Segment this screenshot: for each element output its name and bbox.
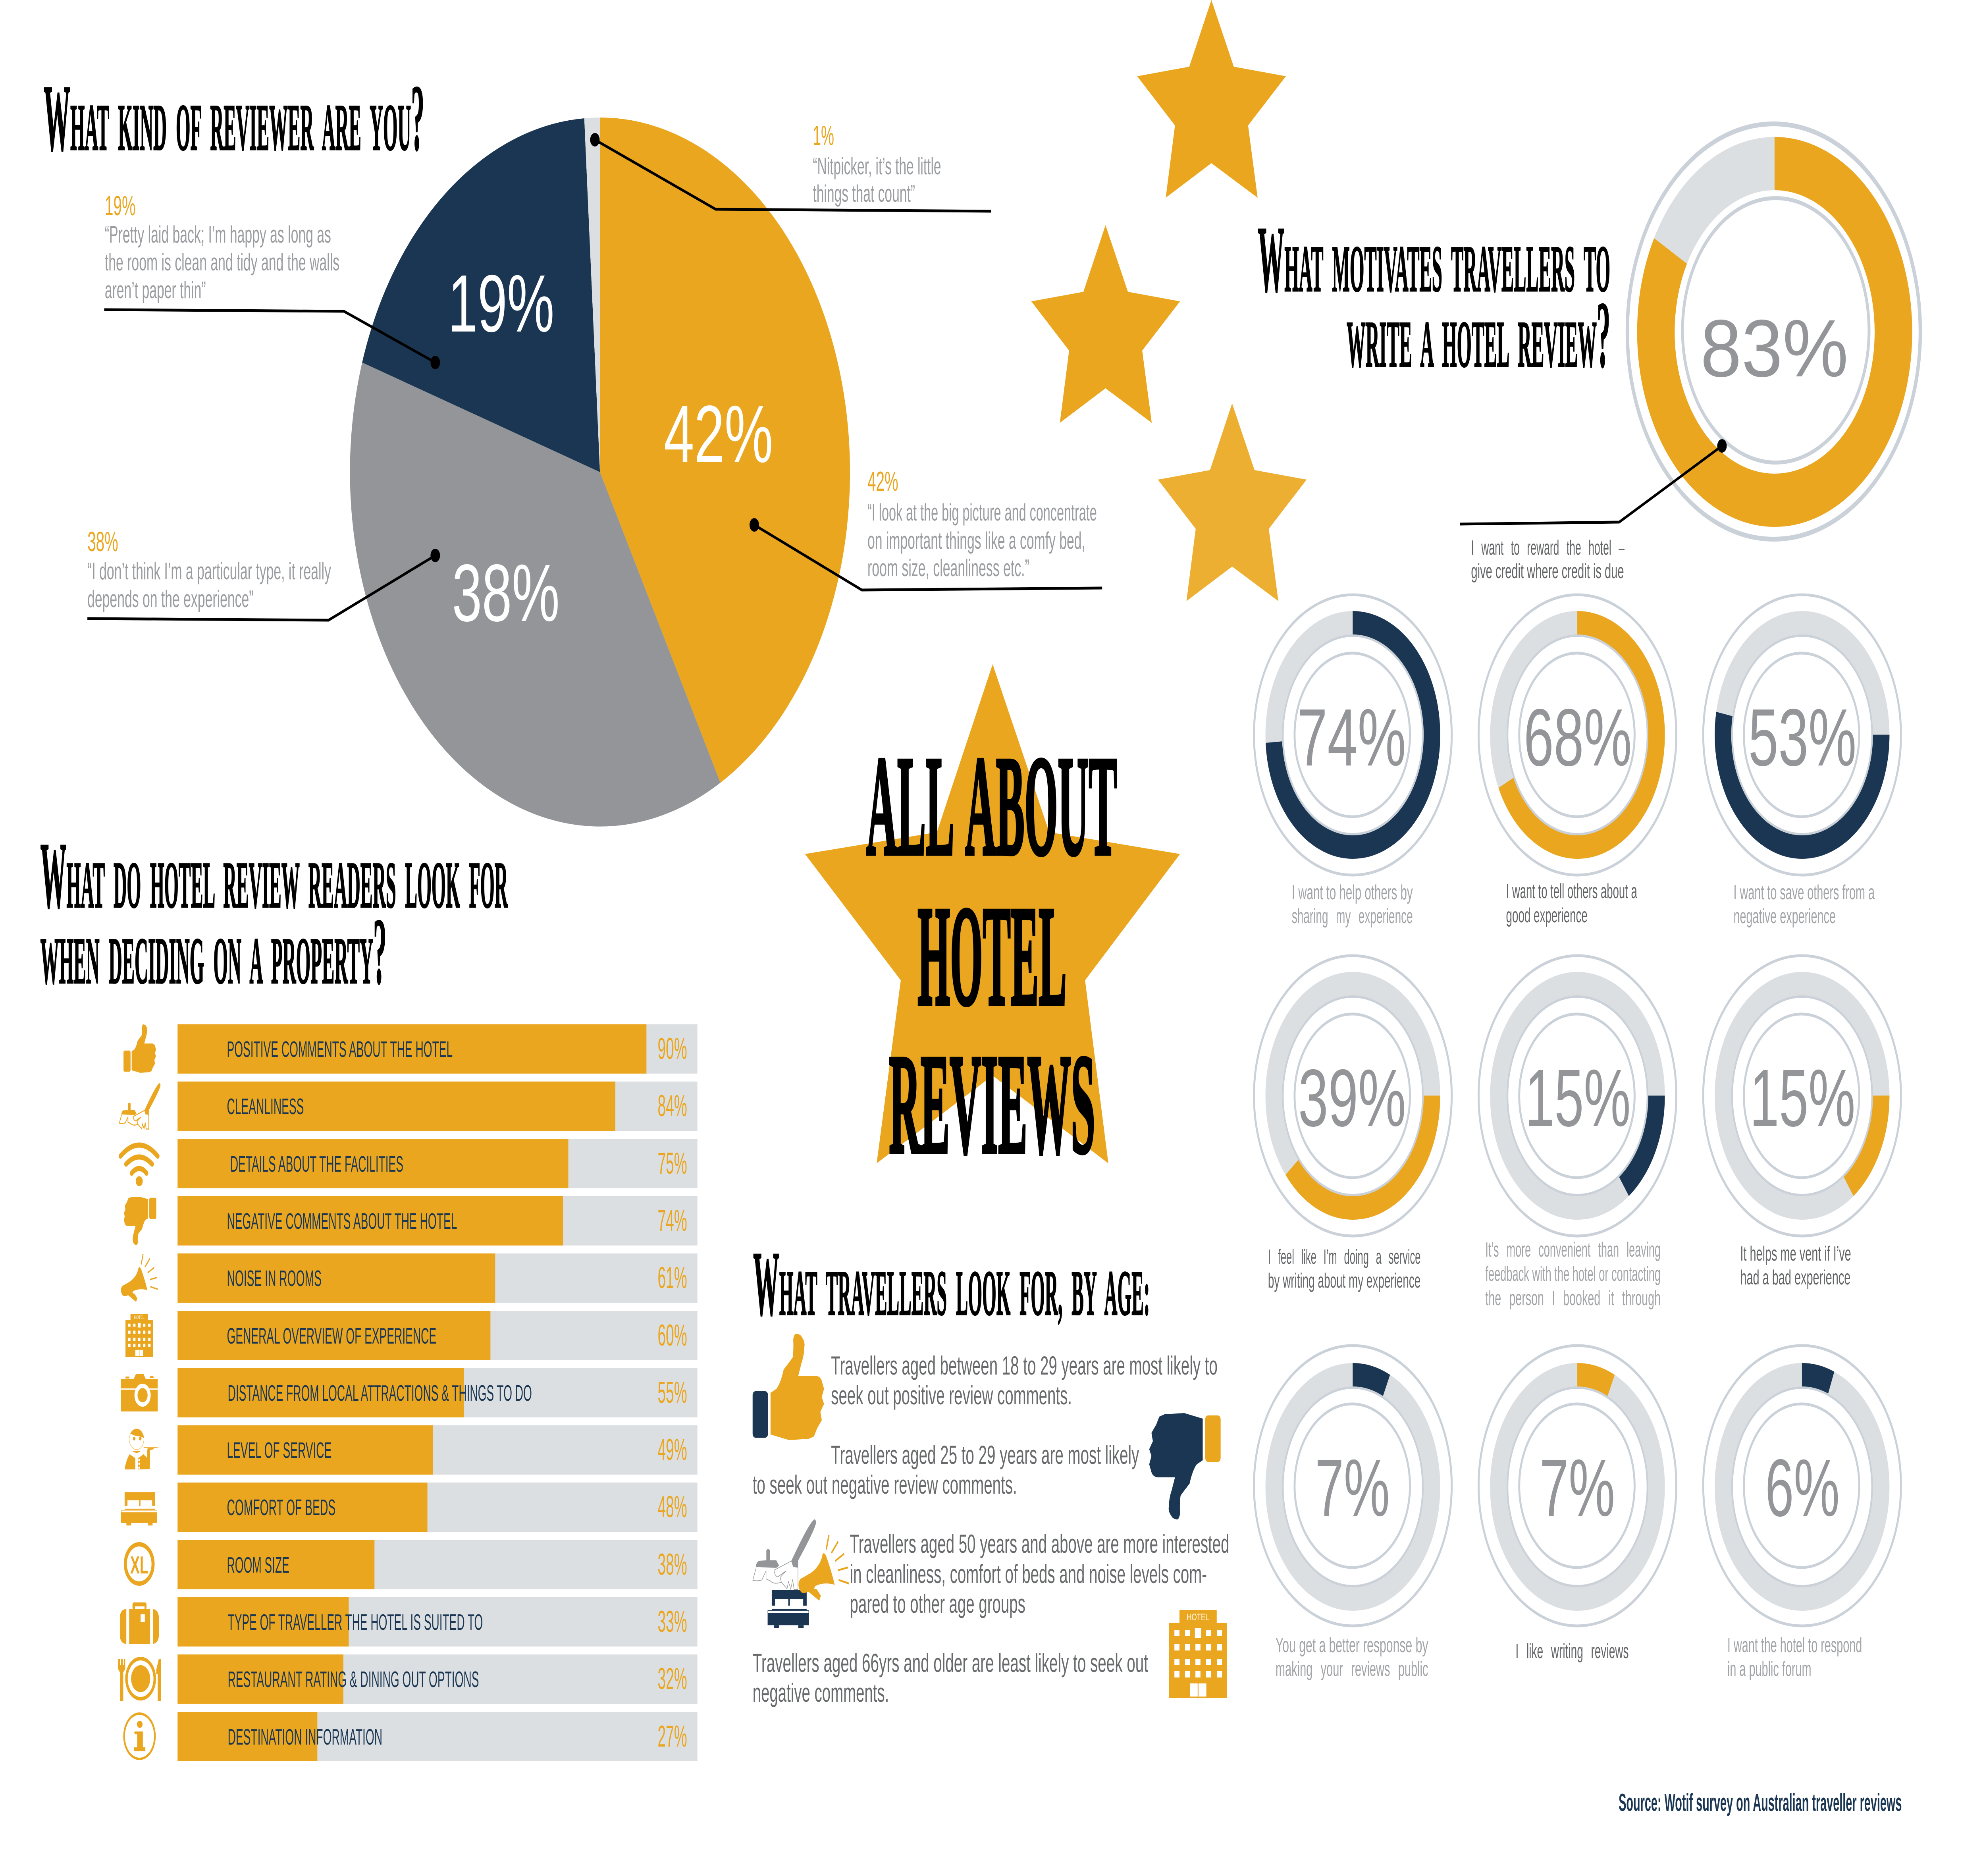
donut: 6% respond in public: in a public forum <box>1727 1657 1812 1681</box>
bar: service 49% <box>177 1425 698 1475</box>
callout: 19% laid back: 19% <box>105 190 135 221</box>
text: WHAT KIND OF REVIEWER ARE YOU? <box>44 65 424 170</box>
pie value 38%: 38% <box>452 547 560 638</box>
icon: thumbs down small <box>124 1197 156 1245</box>
icon: XL room size <box>125 1544 153 1583</box>
bar: distance 55% <box>177 1368 698 1417</box>
donut: 39% doing a service <box>1254 956 1452 1292</box>
callout: 42% big picture <box>750 465 1102 590</box>
bar: service 49%: 49% <box>658 1433 687 1466</box>
donut: 53% save others <box>1703 595 1901 928</box>
decorative star: middle right <box>1158 403 1307 601</box>
big star <box>805 664 1180 1163</box>
pie chart: reviewer types <box>350 118 850 827</box>
text: aged 18 to 29: seek out positive review comments. <box>831 1381 1072 1410</box>
text: WHAT DO HOTEL REVIEW READERS LOOK FOR <box>40 823 508 928</box>
bar: type of traveller 33% <box>177 1597 698 1647</box>
callout: 1% nitpicker: 1% <box>813 120 834 151</box>
donut: 74% help others <box>1254 595 1452 928</box>
donut: 15% more convenient: feedback with the hotel or contacting <box>1485 1262 1661 1286</box>
bar: destination 27% <box>177 1712 698 1761</box>
donut: 15% more convenient <box>1478 956 1677 1310</box>
icon: bed small <box>121 1492 157 1525</box>
bar: noise 61% <box>177 1253 698 1303</box>
bar: cleanliness 84%: CLEANLINESS <box>227 1094 304 1119</box>
donut: 6% respond in public: I want the hotel to respond <box>1727 1633 1862 1657</box>
bar: distance 55%: DISTANCE FROM LOCAL ATTRACTIONS & THINGS TO DO <box>228 1380 532 1406</box>
bar: service 49%: LEVEL OF SERVICE <box>227 1438 331 1463</box>
callout: 38% no particular type: 38% <box>87 526 118 557</box>
bar: destination 27%: DESTINATION INFORMATION <box>228 1724 382 1750</box>
bar: beds 48%: 48% <box>658 1490 687 1523</box>
callout: 19% laid back: the room is clean and tidy and the walls <box>105 249 339 276</box>
pie slice: 19% <box>362 118 600 472</box>
donut: 83% reward the hotel <box>1460 124 1920 583</box>
callout: 38% no particular type: depends on the experience” <box>87 586 253 613</box>
bar: facilities 75% <box>177 1139 698 1188</box>
icon: plate and cutlery <box>118 1657 161 1701</box>
icon: information <box>124 1714 155 1759</box>
bar: positive comments 90% <box>177 1024 698 1074</box>
bar chart: what readers look for <box>177 1024 698 1761</box>
callout: 19% laid back: “Pretty laid back; I’m happy as long as <box>105 222 331 248</box>
hero star with main title <box>805 664 1180 1184</box>
donut: 15% helps me vent: 15% <box>1750 1052 1855 1143</box>
donut: 68% tell others <box>1478 595 1677 927</box>
bar: positive comments 90%: 90% <box>658 1032 687 1065</box>
donut: 39% doing a service: I feel like I’m doing a service <box>1268 1245 1420 1269</box>
donut: 68% tell others: good experience <box>1506 904 1588 927</box>
pie value 42%: 42% <box>664 388 773 480</box>
bar: beds 48%: COMFORT OF BEDS <box>227 1495 335 1520</box>
icon: hotel large: HOTEL <box>1187 1612 1209 1623</box>
text: aged 50 and above <box>850 1529 1230 1619</box>
pie slice: 42% <box>600 118 850 783</box>
callout: 19% laid back <box>104 190 440 369</box>
bar: cleanliness 84%: 84% <box>658 1089 687 1122</box>
pie value 19%: 19% <box>448 258 554 349</box>
donut: 39% doing a service: by writing about my experience <box>1268 1269 1420 1292</box>
bar: distance 55%: 55% <box>658 1375 687 1409</box>
bar: type of traveller 33%: TYPE OF TRAVELLER THE HOTEL IS SUITED TO <box>228 1610 483 1635</box>
bar: facilities 75%: 75% <box>658 1146 687 1180</box>
callout: 38% no particular type <box>87 526 440 620</box>
donut: 53% save others: I want to save others from a <box>1733 881 1875 904</box>
heading: what do hotel review readers look for: WHEN DECIDING ON A PROPERTY? <box>40 898 387 1004</box>
icon: camera <box>121 1374 158 1411</box>
icon: XL room size: XL <box>130 1552 148 1579</box>
text: WHAT TRAVELLERS LOOK FOR, BY AGE: <box>753 1233 1150 1335</box>
donut: 74% help others: sharing my experience <box>1292 904 1413 928</box>
bar: general overview 60%: GENERAL OVERVIEW OF EXPERIENCE <box>227 1323 436 1349</box>
donut: 39% doing a service: 39% <box>1298 1052 1406 1143</box>
donut: 6% respond in public: 6% <box>1765 1442 1840 1533</box>
icon: hotel small: HOTEL <box>134 1315 145 1321</box>
heading: what motivates travellers <box>1258 206 1610 387</box>
donut: 7% better response: making your reviews public <box>1276 1657 1428 1681</box>
callout: 1% nitpicker <box>590 120 991 211</box>
donut: 6% respond in public <box>1703 1346 1901 1681</box>
text: aged 50 and above: Travellers aged 50 years and above are more interested <box>850 1529 1230 1559</box>
donut: 7% better response <box>1254 1346 1452 1681</box>
text: WRITE A HOTEL REVIEW? <box>1347 282 1610 387</box>
heading: what do hotel review readers look for <box>40 823 508 1004</box>
bar: destination 27%: 27% <box>658 1719 687 1753</box>
donut: 15% helps me vent: had a bad experience <box>1740 1266 1850 1289</box>
callout: 19% laid back: aren’t paper thin” <box>105 277 206 304</box>
icon: wifi <box>120 1145 158 1184</box>
text: aged 66 and older: negative comments. <box>753 1678 889 1708</box>
bar: positive comments 90%: POSITIVE COMMENTS ABOUT THE HOTEL <box>227 1037 453 1062</box>
text: aged 25 to 29: Travellers aged 25 to 29 years are most likely <box>831 1440 1139 1470</box>
bar: room size 38%: ROOM SIZE <box>227 1552 289 1578</box>
bar: general overview 60%: 60% <box>658 1318 687 1352</box>
hero star with main title: REVIEWS <box>889 1025 1095 1184</box>
icon: brush, bed and megaphone group <box>753 1519 849 1628</box>
bar: restaurant 32% <box>177 1654 698 1704</box>
donut: 83% reward the hotel: I want to reward the hotel – <box>1471 536 1625 559</box>
bar: facilities 75%: DETAILS ABOUT THE FACILITIES <box>230 1151 403 1177</box>
text: aged 50 and above: pared to other age groups <box>850 1589 1025 1619</box>
donut: 83% reward the hotel: give credit where credit is due <box>1471 559 1624 583</box>
decorative star: top <box>1137 0 1286 198</box>
callout: 42% big picture: on important things like a comfy bed, <box>867 528 1085 554</box>
text: aged 25 to 29 <box>753 1440 1139 1500</box>
donut: 7% better response: You get a better response by <box>1276 1633 1428 1657</box>
donut: 15% helps me vent: It helps me vent if I’ve <box>1740 1242 1851 1265</box>
donut: 68% tell others: 68% <box>1524 692 1632 783</box>
text: aged 66 and older: Travellers aged 66yrs and older are least likely to seek out <box>753 1648 1148 1678</box>
icon: thumbs up large <box>753 1334 824 1440</box>
hero star with main title: HOTEL <box>917 877 1067 1035</box>
bar: general overview 60% <box>177 1311 698 1360</box>
donut: 53% save others: 53% <box>1748 692 1856 783</box>
callout: 1% nitpicker: things that count” <box>813 181 915 207</box>
decorative star: middle left <box>1031 225 1180 423</box>
callout: 42% big picture: room size, cleanliness etc.” <box>867 555 1029 582</box>
bar: negative comments 74%: 74% <box>658 1203 687 1237</box>
donut: 68% tell others: I want to tell others about a <box>1506 879 1637 903</box>
text: aged 66 and older <box>753 1648 1148 1708</box>
donut: 7% like writing: 7% <box>1540 1442 1615 1533</box>
donut: 74% help others: I want to help others by <box>1292 881 1413 904</box>
donut: 74% help others: 74% <box>1297 692 1406 783</box>
bar: negative comments 74% <box>177 1196 698 1246</box>
bar: negative comments 74%: NEGATIVE COMMENTS ABOUT THE HOTEL <box>227 1209 457 1234</box>
bar: noise 61%: NOISE IN ROOMS <box>227 1266 322 1291</box>
icon: bellhop <box>125 1429 158 1469</box>
hero star with main title: ALL ABOUT <box>866 727 1117 885</box>
bar: room size 38%: 38% <box>658 1547 687 1581</box>
text: aged 50 and above: in cleanliness, comfort of beds and noise levels com- <box>850 1560 1207 1589</box>
icon: thumbs down large <box>1149 1413 1221 1519</box>
bar: type of traveller 33%: 33% <box>658 1604 687 1638</box>
donut: 53% save others: negative experience <box>1733 904 1836 928</box>
icon: hotel small <box>125 1314 153 1357</box>
pie slice: 1% <box>584 118 600 472</box>
bar: cleanliness 84% <box>177 1082 698 1131</box>
donut: 15% helps me vent <box>1703 956 1901 1289</box>
donut: 15% more convenient: It’s more convenient than leaving <box>1485 1238 1661 1261</box>
donut: 15% more convenient: the person I booked it through <box>1485 1286 1661 1310</box>
text: aged 25 to 29: to seek out negative review comments. <box>753 1470 1017 1500</box>
donut: 7% better response: 7% <box>1315 1442 1390 1533</box>
callout: 42% big picture: 42% <box>867 465 898 497</box>
text: aged 18 to 29 <box>831 1351 1218 1410</box>
bar: room size 38% <box>177 1540 698 1589</box>
icon: megaphone small <box>121 1254 158 1302</box>
text: aged 18 to 29: Travellers aged between 18 to 29 years are most likely to <box>831 1351 1218 1380</box>
icon: thumbs up small <box>123 1024 156 1073</box>
pie slice: 38% <box>350 362 721 827</box>
callout: 1% nitpicker: “Nitpicker, it’s the little <box>813 153 941 180</box>
icon: hotel large <box>1169 1610 1227 1698</box>
donut: 7% like writing <box>1478 1346 1677 1663</box>
donut: 83% reward the hotel: 83% <box>1700 303 1848 394</box>
donut: 15% more convenient: 15% <box>1525 1052 1631 1143</box>
bar: restaurant 32%: 32% <box>658 1662 687 1695</box>
source note: Source: Wotif survey on Australian traveller reviews <box>1619 1788 1902 1816</box>
donut: 7% like writing: I like writing reviews <box>1516 1639 1629 1663</box>
callout: 38% no particular type: “I don’t think I’m a particular type, it really <box>87 558 331 585</box>
icon: suitcase <box>120 1602 159 1644</box>
bar: noise 61%: 61% <box>658 1261 687 1294</box>
icon: brush and hand small <box>119 1083 160 1129</box>
bar: beds 48% <box>177 1483 698 1532</box>
callout: 42% big picture: “I look at the big picture and concentrate <box>867 499 1097 526</box>
bar: restaurant 32%: RESTAURANT RATING & DINING OUT OPTIONS <box>228 1667 479 1692</box>
